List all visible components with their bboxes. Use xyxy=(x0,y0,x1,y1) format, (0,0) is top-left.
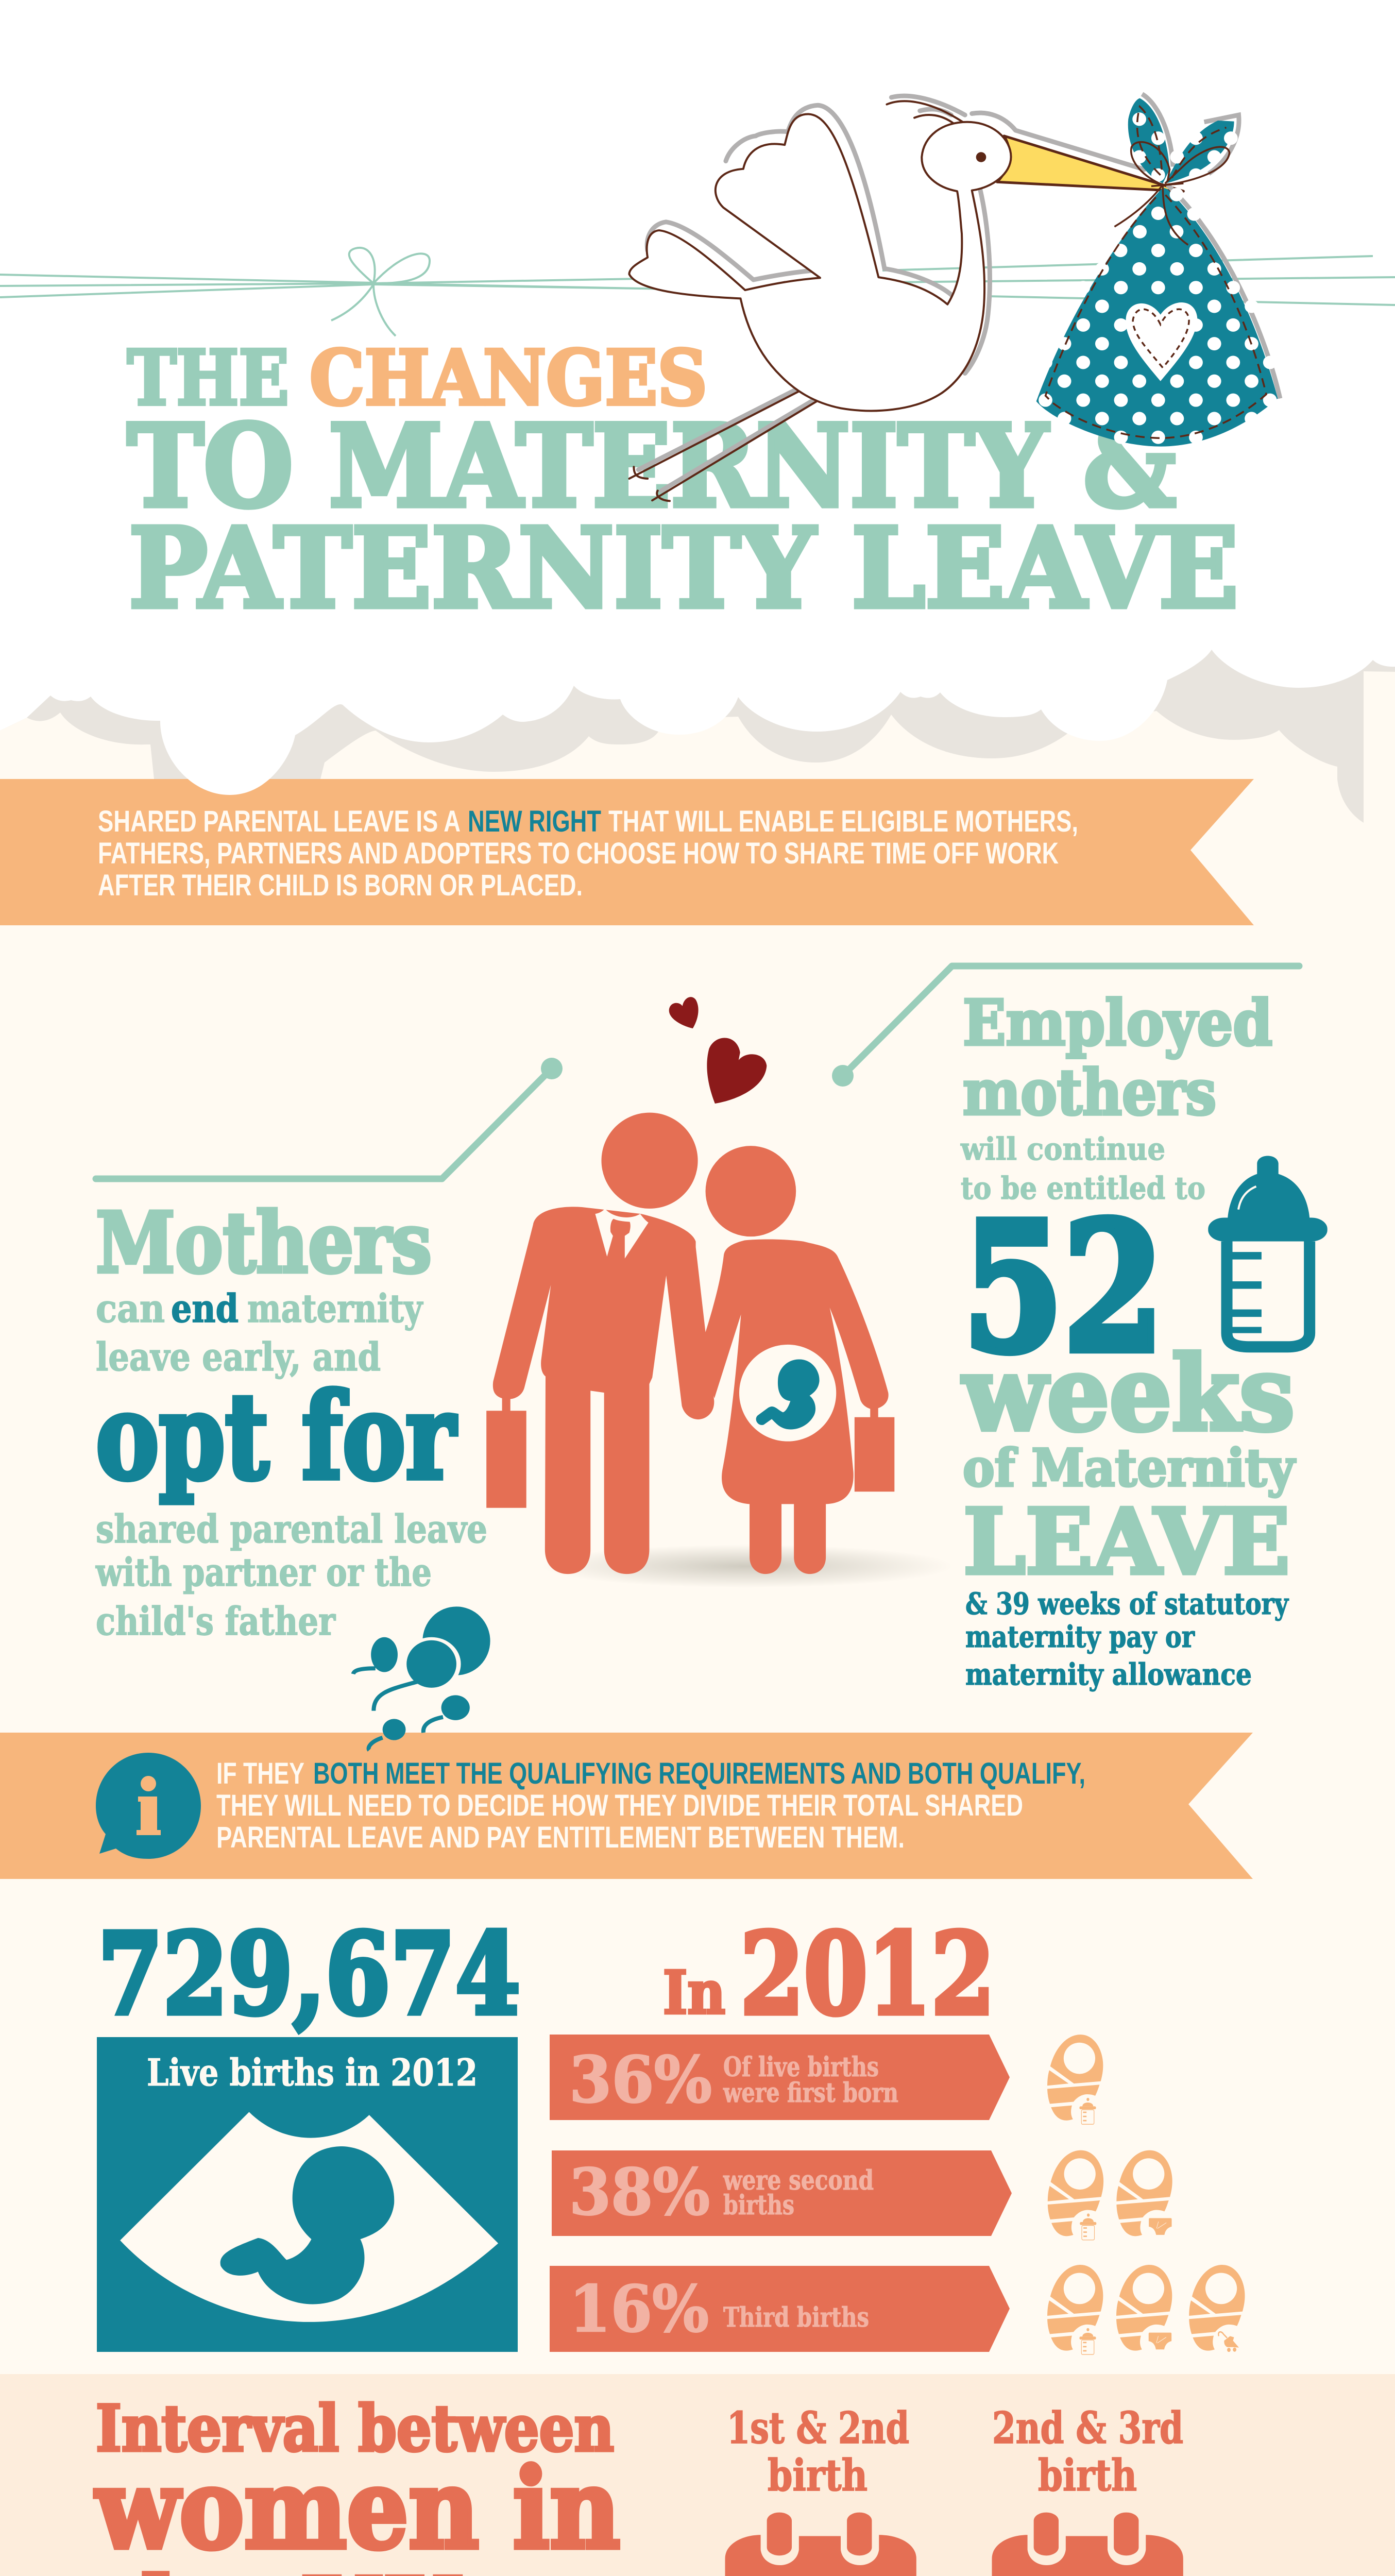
text block: mothers: can xyxy=(96,1286,165,1331)
stat bar: 36% first born: were first born xyxy=(723,2077,898,2109)
text block: mothers: child's father xyxy=(96,1599,336,1644)
stork crest xyxy=(887,101,963,123)
callout connector right xyxy=(832,966,1299,1087)
banner text: new right: SHARED PARENTAL LEAVE IS A xyxy=(98,805,461,838)
banner text: qualifying requirements: PARENTAL LEAVE AND PAY ENTITLEMENT BETWEEN THEM. xyxy=(216,1821,905,1854)
title: TO MATERNITY & xyxy=(127,399,1176,533)
label: 2nd and 3rd birth: birth xyxy=(1038,2450,1137,2501)
stat bar: 38% second births: births xyxy=(723,2190,794,2221)
title: PATERNITY LEAVE xyxy=(129,504,1238,633)
stat bar: 16% third births: Third births xyxy=(723,2302,869,2333)
icon: info bubble xyxy=(96,1753,201,1859)
text block: mothers: Mothers xyxy=(96,1194,432,1292)
panel: live births ultrasound xyxy=(97,2037,518,2352)
text block: mothers: shared parental leave xyxy=(96,1506,487,1552)
label: 1st and 2nd birth: 1st & 2nd xyxy=(727,2402,909,2453)
banner: new right xyxy=(0,779,1254,925)
bundle shadow xyxy=(1142,94,1280,398)
text block: mothers: maternity xyxy=(247,1286,423,1331)
stork beak xyxy=(997,136,1183,191)
banner text: new right: FATHERS, PARTNERS AND ADOPTERS TO CHOOSE HOW TO SHARE TIME OFF WORK xyxy=(98,837,1059,870)
stat bar: 36% first born: 36% xyxy=(569,2043,712,2117)
banner text: new right xyxy=(98,805,1078,902)
stork eye xyxy=(976,152,986,162)
panel: interval between births xyxy=(0,2374,1395,2576)
text block: employed mothers: mothers xyxy=(963,1055,1216,1129)
man collar and tie xyxy=(595,1209,649,1259)
clothesline with bow xyxy=(0,248,1395,336)
illustration: couple with pregnant mother xyxy=(486,997,894,1574)
icon: baby bottle xyxy=(1208,1156,1328,1347)
fetus xyxy=(756,1359,820,1429)
heading: in 2012: In xyxy=(663,1958,725,2028)
belly circle xyxy=(739,1345,836,1442)
ultrasound fan xyxy=(120,2112,498,2322)
label: 1st and 2nd birth: birth xyxy=(768,2450,867,2501)
banner text: qualifying requirements: IF THEY xyxy=(216,1757,304,1790)
label: 1st and 2nd birth xyxy=(727,2402,909,2501)
text block: employed mothers: & 39 weeks of statutory xyxy=(965,1586,1289,1621)
stork body xyxy=(629,114,1011,411)
text block: employed mothers: will continue xyxy=(960,1131,1165,1167)
text block: employed mothers: Employed xyxy=(963,986,1272,1060)
text block: employed mothers: maternity pay or xyxy=(965,1619,1195,1654)
text block: mothers: opt for xyxy=(96,1367,457,1506)
bundle heart xyxy=(1126,302,1197,381)
text block: mothers xyxy=(95,1194,487,1644)
man figure xyxy=(486,1207,714,1574)
ground shadow under couple xyxy=(541,1545,953,1588)
heading: interval xyxy=(95,2392,620,2576)
heading: in 2012: 2012 xyxy=(740,1908,995,2040)
banner text: new right: AFTER THEIR CHILD IS BORN OR PLACED. xyxy=(98,869,583,902)
text block: mothers: with partner or the xyxy=(95,1550,432,1595)
banner text: qualifying requirements: THEY WILL NEED TO DECIDE HOW THEY DIVIDE THEIR TOTAL SHARED xyxy=(216,1789,1023,1822)
icon: calendar 36 months xyxy=(725,2513,916,2576)
text block: employed mothers: maternity allowance xyxy=(965,1657,1252,1692)
callout connector left xyxy=(96,1058,563,1179)
stat: 729,674: 729,674 xyxy=(98,1908,520,2040)
text block: employed mothers: weeks xyxy=(962,1333,1295,1454)
icon: sperm and egg xyxy=(353,1606,490,1750)
stat bar: 38% second births: 38% xyxy=(569,2155,710,2230)
label: 2nd and 3rd birth: 2nd & 3rd xyxy=(992,2402,1183,2453)
stat bar: 16% third births xyxy=(550,2266,1010,2352)
text block: mothers: end xyxy=(171,1286,239,1331)
stat bar: 36% first born xyxy=(550,2035,1010,2120)
bundle stitching xyxy=(1046,107,1266,438)
bundle polka dots xyxy=(1039,112,1277,444)
banner text: new right: NEW RIGHT xyxy=(468,805,601,838)
woman head xyxy=(706,1146,796,1236)
text block: employed mothers: LEAVE xyxy=(963,1489,1290,1595)
bundle ears xyxy=(1128,98,1234,183)
banner: qualifying requirements xyxy=(0,1733,1253,1879)
title xyxy=(127,333,1238,633)
text block: employed mothers xyxy=(960,986,1296,1692)
illustration: stork carrying bundle xyxy=(629,94,1280,501)
woman figure xyxy=(700,1240,894,1574)
white cloud header xyxy=(0,0,1395,795)
banner text: new right: THAT WILL ENABLE ELIGIBLE MOTHERS, xyxy=(608,805,1078,838)
heading: interval: Interval between xyxy=(96,2392,614,2466)
stork legs xyxy=(629,388,836,501)
text block: employed mothers: 52 xyxy=(963,1183,1164,1392)
icon: calendar 41 months xyxy=(992,2513,1183,2576)
stork shadow xyxy=(638,96,1144,490)
man head xyxy=(601,1113,698,1209)
grey cloud shadow xyxy=(0,644,1395,823)
stat bar: 38% second births xyxy=(552,2150,1012,2236)
title: CHANGES xyxy=(310,333,707,422)
text block: employed mothers: of Maternity xyxy=(963,1437,1296,1498)
stat bar: 38% second births: were second xyxy=(723,2165,874,2196)
label: live births: Live births in 2012 xyxy=(147,2050,478,2094)
title: THE xyxy=(127,333,289,422)
hearts xyxy=(669,997,767,1104)
label: 2nd and 3rd birth xyxy=(992,2402,1183,2501)
text block: mothers: leave early, and xyxy=(96,1334,381,1380)
stat bar: 36% first born: Of live births xyxy=(723,2052,879,2083)
icons: swaddled babies xyxy=(1047,2035,1245,2354)
banner text: qualifying requirements: BOTH MEET THE QUALIFYING REQUIREMENTS AND BOTH QUALIFY, xyxy=(313,1757,1085,1790)
heading: interval: women in xyxy=(95,2444,620,2574)
stat bar: 16% third births: 16% xyxy=(569,2272,709,2347)
bundle cloth xyxy=(1036,188,1278,447)
banner text: qualifying requirements xyxy=(216,1757,1085,1854)
text block: employed mothers: to be entitled to xyxy=(961,1171,1205,1207)
